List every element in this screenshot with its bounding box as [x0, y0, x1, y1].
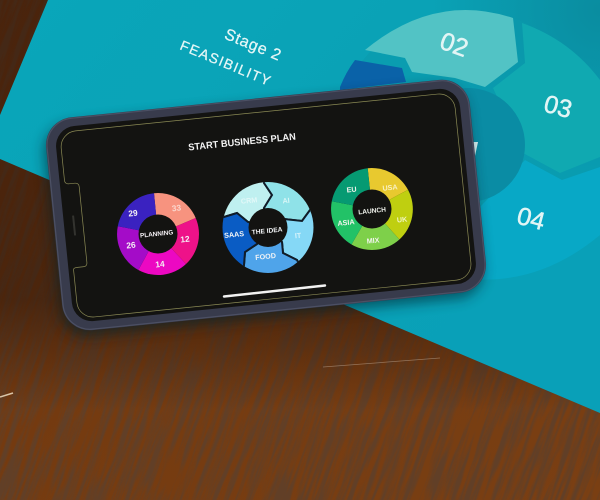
phone shadow [41, 83, 486, 339]
donut chart: planning: 26 [126, 240, 136, 250]
donut chart: launch: EU [346, 184, 357, 194]
donut chart: planning: 29 [128, 208, 138, 218]
blue segment [340, 60, 406, 90]
segment 02 [365, 10, 518, 87]
donut chart: launch: USA [382, 182, 398, 193]
donut chart: launch: ASIA [337, 217, 355, 228]
donut chart: planning: 12 [180, 234, 190, 244]
number 03: 03 [541, 90, 575, 124]
home indicator bar [224, 286, 325, 296]
screen notch outline [60, 92, 472, 319]
segmented wheel: the idea: THE IDEA [251, 226, 283, 237]
donut chart: planning: PLANNING [140, 229, 174, 240]
number 04: 04 [514, 202, 548, 236]
segmented wheel: the idea: CRM [240, 195, 258, 206]
donut chart: planning: 14 [155, 259, 165, 269]
title: START BUSINESS PLAN [188, 132, 296, 153]
phone screen [54, 87, 478, 323]
phone [43, 77, 489, 333]
number 02: 02 [436, 27, 472, 63]
donut chart: launch: LAUNCH [358, 207, 387, 216]
donut chart: launch: MIX [366, 235, 380, 246]
paper circular diagram [333, 10, 600, 280]
donut chart: launch [331, 168, 413, 250]
segmented wheel: the idea: IT [294, 231, 302, 240]
phone case [43, 77, 489, 333]
segmented wheel: the idea: AI [282, 196, 290, 205]
segmented wheel: the idea: FOOD [255, 251, 276, 262]
donut chart: planning [117, 193, 199, 275]
white tip of centre text [474, 142, 478, 156]
segmented wheel: the idea [222, 182, 314, 273]
segment 03 [493, 23, 600, 173]
segmented wheel: the idea: SAAS [224, 229, 245, 240]
donut chart: launch: UK [396, 214, 408, 224]
donut chart: planning: 33 [171, 202, 182, 213]
segment 04 [480, 160, 600, 280]
heading: Stage 2: Stage 2 [222, 26, 284, 65]
inner circle [462, 88, 525, 200]
notch speaker [72, 215, 76, 236]
heading: FEASIBILITY: FEASIBILITY [178, 37, 274, 89]
